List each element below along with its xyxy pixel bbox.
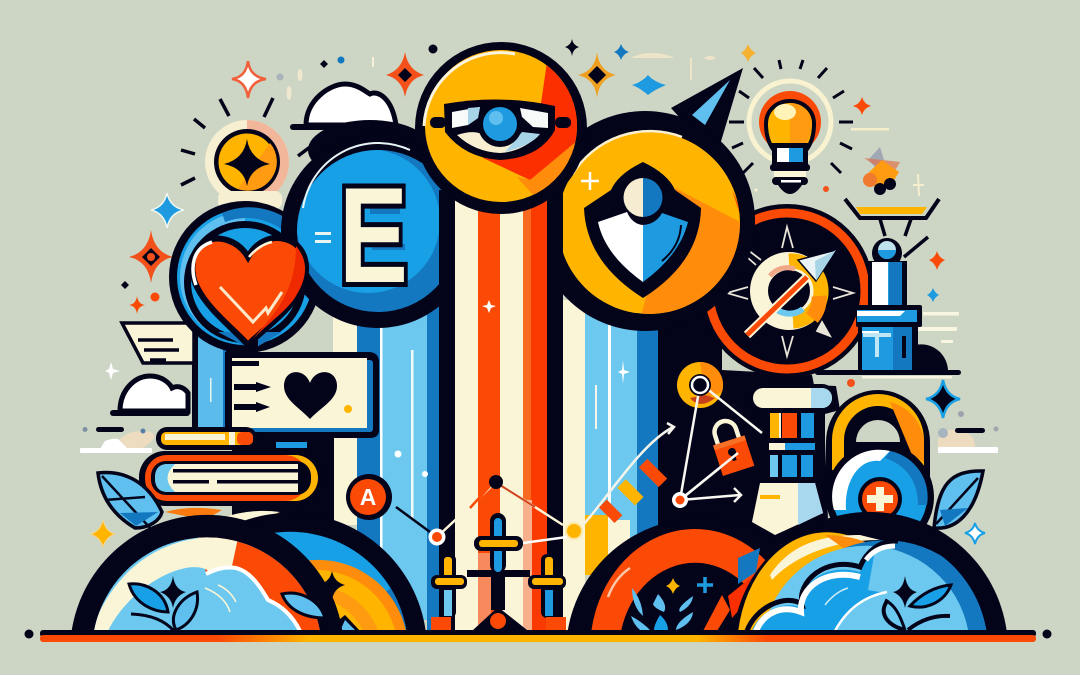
badge A: A [360,484,376,510]
sprout [884,576,951,630]
small cloud: right [938,426,998,453]
badge A [346,474,392,520]
sparkles inside hill [666,577,713,594]
sparkles: right [754,97,959,343]
hill: left back [245,513,426,630]
glasses and eye [430,99,571,160]
hill: right right [733,512,1007,631]
icon: lock [707,416,754,476]
shield emblem [584,162,701,298]
icon: black heart [284,372,337,419]
sparkles: lower right [847,379,985,544]
network with small lock [672,362,762,508]
columns: right group [563,300,659,630]
compass [700,204,874,378]
cloud: top [290,84,396,130]
compass needle [747,250,836,335]
sparkles: upper left [121,52,424,314]
heart [192,238,306,358]
leaf: right [934,471,983,528]
cloud in hill [747,541,898,631]
padlock with cross [826,390,934,551]
shield circle [560,68,755,331]
book stack [139,427,323,506]
columns: centre group [439,190,563,630]
E circle [281,120,442,328]
sparkles: upper centre [428,39,756,98]
line chart with A badge [346,423,674,546]
coin with star and rays [181,98,310,209]
compass dial [759,261,821,321]
sprout [129,576,198,631]
columns: left group [333,300,439,630]
compass ticks [727,227,853,356]
chart line [396,507,430,532]
clipboard note [122,323,194,363]
small blue leaves [631,588,693,630]
sparkle: gold [90,520,115,547]
hill: right left [568,518,832,631]
pillar with bowl [815,199,961,378]
letter E: E [339,159,408,311]
scale structure [431,513,566,630]
chart flags [599,459,667,523]
card with heart [225,352,379,438]
ground line [24,630,1052,642]
bulb and rays [729,60,853,194]
cloud: left [105,362,190,416]
leaf: left [98,473,162,530]
abstract tangle [863,147,900,195]
stone pillar [750,384,836,535]
back column: left [192,320,233,432]
eye circle [415,42,587,214]
back shapes behind left hills [165,436,334,532]
heart medallion ring [169,201,321,353]
hill: left front [72,515,342,631]
black backdrop mass [658,300,840,545]
left small cloud and dash [80,427,154,453]
sprout right [282,593,327,630]
